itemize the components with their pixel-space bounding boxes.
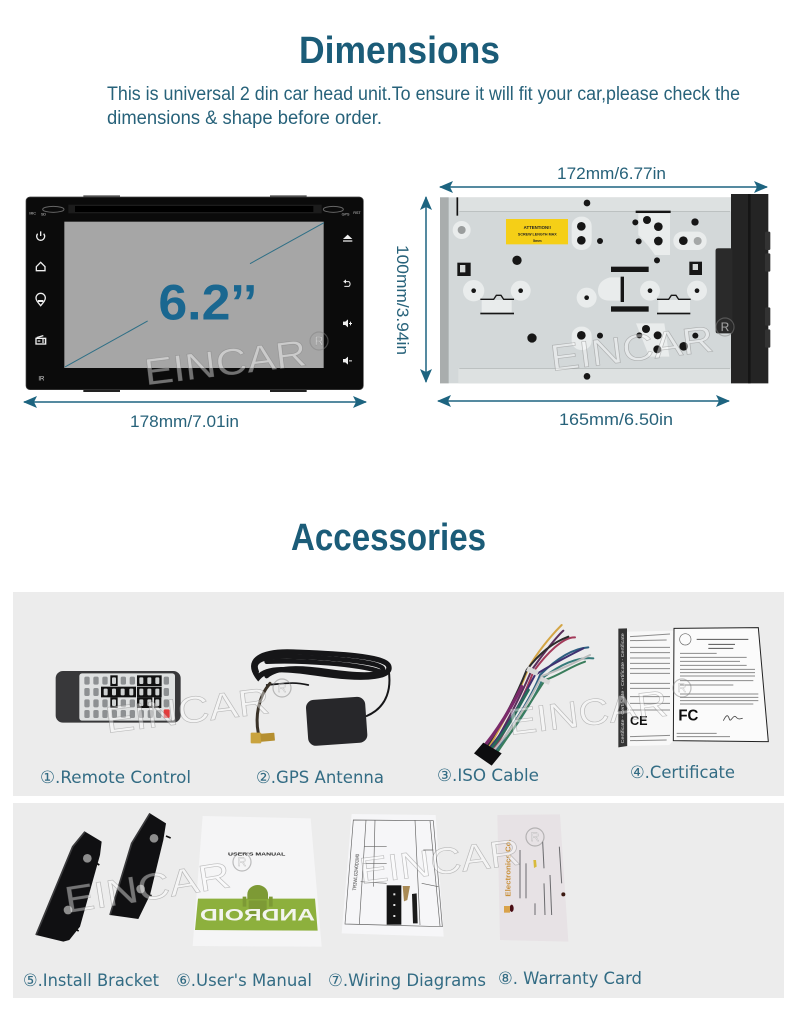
user's manual: USER'S MANUAL bbox=[228, 851, 285, 857]
caption: certificate: ④.Certificate bbox=[630, 763, 735, 783]
watermarks: EINCAR: R bbox=[721, 320, 730, 334]
caption: user's manual: ⑥.User's Manual bbox=[176, 971, 312, 991]
width arrow: 165mm bbox=[438, 400, 729, 402]
chassis holes bbox=[457, 200, 702, 380]
certificate of conformity booklet: CE bbox=[630, 714, 648, 728]
head unit front view: IR bbox=[38, 377, 45, 383]
FCC certificate sheet: FC bbox=[678, 707, 698, 724]
warranty card bbox=[497, 814, 568, 942]
watermarks: EINCAR: EINCAR bbox=[62, 854, 233, 921]
caption: install bracket: ⑤.Install Bracket bbox=[23, 971, 159, 991]
ISO cable bbox=[474, 625, 593, 766]
watermarks: EINCAR: R bbox=[678, 681, 687, 695]
caption: ISO cable: ③.ISO Cable bbox=[437, 766, 539, 786]
screen diagonal bbox=[65, 223, 324, 367]
remote control bbox=[56, 671, 181, 723]
intro text: dimensions & shape before order. bbox=[107, 108, 382, 129]
right touch icons bbox=[343, 235, 352, 365]
head unit front view bbox=[26, 195, 363, 392]
user's manual bbox=[193, 816, 322, 947]
label: 172mm: 172mm/6.77in bbox=[557, 164, 666, 183]
watermarks: EINCAR bbox=[62, 318, 734, 921]
label: 178mm: 178mm/7.01in bbox=[130, 412, 239, 431]
width arrow: 178mm bbox=[24, 401, 366, 403]
wiring diagrams sheet: TR3WLG2H0D1M0 bbox=[352, 854, 361, 891]
height arrow: 100mm bbox=[425, 197, 427, 382]
panel: accessories row 1 bbox=[13, 592, 784, 796]
caption: remote control: ①.Remote Control bbox=[40, 768, 191, 788]
FCC certificate sheet bbox=[673, 628, 768, 742]
title: Dimensions: Dimensions bbox=[299, 30, 500, 72]
watermarks: EINCAR: EINCAR bbox=[506, 683, 670, 743]
head unit front view: GPS bbox=[342, 213, 350, 217]
intro text bbox=[107, 84, 740, 129]
title: Accessories: Accessories bbox=[291, 517, 486, 559]
label: 100mm: 100mm/3.94in bbox=[393, 245, 412, 355]
watermarks: EINCAR: EINCAR bbox=[103, 680, 272, 741]
intro text: This is universal 2 din car head unit.To ensure it will fit your car,please check the bbox=[107, 84, 740, 105]
caption: warranty card: ⑧. Warranty Card bbox=[498, 969, 642, 989]
watermarks: EINCAR: R bbox=[315, 334, 324, 348]
screen bbox=[64, 222, 324, 368]
chassis side view: ATTENTION!! bbox=[524, 225, 552, 230]
GPS antenna bbox=[251, 652, 389, 746]
watermarks: EINCAR: R bbox=[238, 855, 247, 869]
caption: GPS antenna: ②.GPS Antenna bbox=[256, 768, 384, 788]
user's manual: ANDROID bbox=[200, 906, 315, 925]
yellow warning label bbox=[506, 219, 568, 244]
caption: wiring diagrams: ⑦.Wiring Diagrams bbox=[328, 971, 486, 991]
black faceplate bbox=[716, 194, 768, 383]
watermarks: EINCAR: EINCAR bbox=[357, 832, 523, 892]
chassis side view bbox=[440, 194, 770, 383]
watermarks: EINCAR: EINCAR bbox=[548, 318, 716, 379]
certificate of conformity booklet bbox=[618, 628, 674, 747]
head unit front view: MIC bbox=[29, 212, 36, 216]
width arrow: 172mm bbox=[440, 186, 767, 188]
chassis side view: 5mm bbox=[533, 239, 542, 243]
watermarks: EINCAR: EINCAR bbox=[142, 332, 309, 393]
label: 165mm: 165mm/6.50in bbox=[559, 410, 673, 429]
certificates bbox=[618, 628, 768, 747]
light stamped recesses bbox=[453, 213, 707, 357]
watermarks: EINCAR: R bbox=[278, 681, 287, 695]
head unit front view: SD bbox=[41, 212, 46, 216]
screen size label: 6.2’’ bbox=[158, 274, 257, 330]
install brackets bbox=[36, 813, 171, 942]
panel: accessories row 2 bbox=[13, 803, 784, 998]
head unit front view: RST bbox=[353, 211, 361, 215]
warranty card: Electronics Co. bbox=[505, 839, 512, 897]
left touch icons bbox=[36, 231, 46, 344]
chassis side view: SCREW LENGTH MAX bbox=[518, 233, 557, 237]
certificate of conformity booklet: Certificate - Certificate - Certificate - Certificate bbox=[620, 633, 626, 743]
wiring diagrams sheet bbox=[342, 814, 444, 937]
watermarks: EINCAR: R bbox=[531, 830, 540, 844]
